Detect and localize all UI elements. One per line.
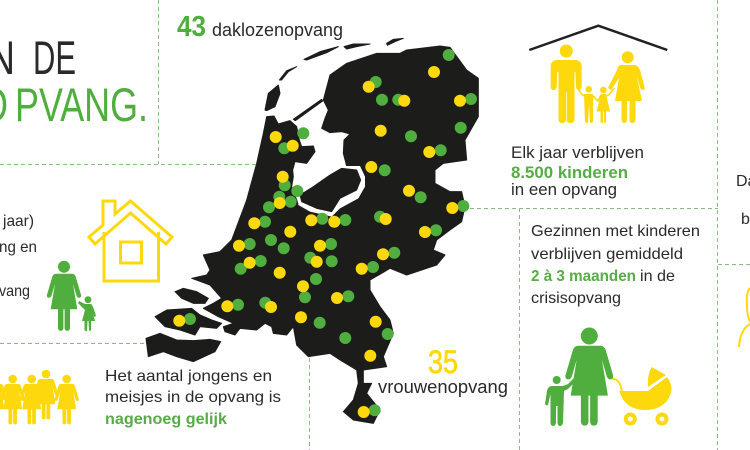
- text: jongens en meisjes: meisjes in de opvang is: [105, 389, 281, 406]
- text: verblijfsduur: 2 à 3 maanden: [531, 268, 636, 285]
- text: jongens en meisjes: [105, 368, 281, 428]
- map dots: yellow locations: [173, 66, 466, 418]
- stat: 35 vrouwenopvang: [378, 344, 508, 397]
- text: verblijfsduur: verblijven gemiddeld: [531, 246, 683, 263]
- stat: 43 daklozenopvang: 43: [177, 11, 206, 43]
- text: kinderen per jaar: Elk jaar verblijven: [511, 143, 644, 162]
- title: PVANG.: [15, 78, 148, 131]
- text: verblijfsduur: Gezinnen met kinderen: [531, 223, 700, 240]
- text: verblijfsduur: crisisopvang: [531, 290, 621, 307]
- text: verblijfsduur: [531, 223, 700, 307]
- map of the Netherlands: [146, 38, 478, 423]
- text: jongens en meisjes: nagenoeg gelijk: [105, 411, 227, 428]
- stat: 35 vrouwenopvang: vrouwenopvang: [378, 377, 508, 397]
- title: DE: [33, 31, 76, 84]
- icon: family under roof: [529, 26, 667, 123]
- text: left cropped block: vang: [0, 283, 30, 300]
- text: kinderen per jaar: [511, 143, 644, 199]
- text: right cropped block: b: [741, 211, 750, 228]
- text: left cropped block: jaar): [2, 213, 34, 230]
- text: verblijfsduur: in de: [640, 268, 675, 285]
- map dots: green locations: [184, 49, 477, 416]
- icon: yellow house: [89, 201, 172, 281]
- stat: 35 vrouwenopvang: 35: [428, 344, 458, 380]
- stat: 43 daklozenopvang: daklozenopvang: [212, 20, 343, 40]
- text: left cropped block: [0, 213, 37, 300]
- text: kinderen per jaar: in een opvang: [511, 180, 617, 199]
- stat: 43 daklozenopvang: [177, 11, 343, 43]
- icon: mother with child and pram: [545, 328, 672, 426]
- title: [0, 31, 148, 131]
- text: kinderen per jaar: 8.500 kinderen: [511, 163, 628, 182]
- text: jongens en meisjes: Het aantal jongens en: [105, 368, 272, 385]
- text: right cropped block: [736, 173, 750, 228]
- icon: group of women: [0, 370, 79, 424]
- icon: cropped yellow figure: [739, 288, 750, 347]
- icon: mother and daughter: [47, 261, 96, 331]
- text: left cropped block: ng en: [0, 239, 37, 256]
